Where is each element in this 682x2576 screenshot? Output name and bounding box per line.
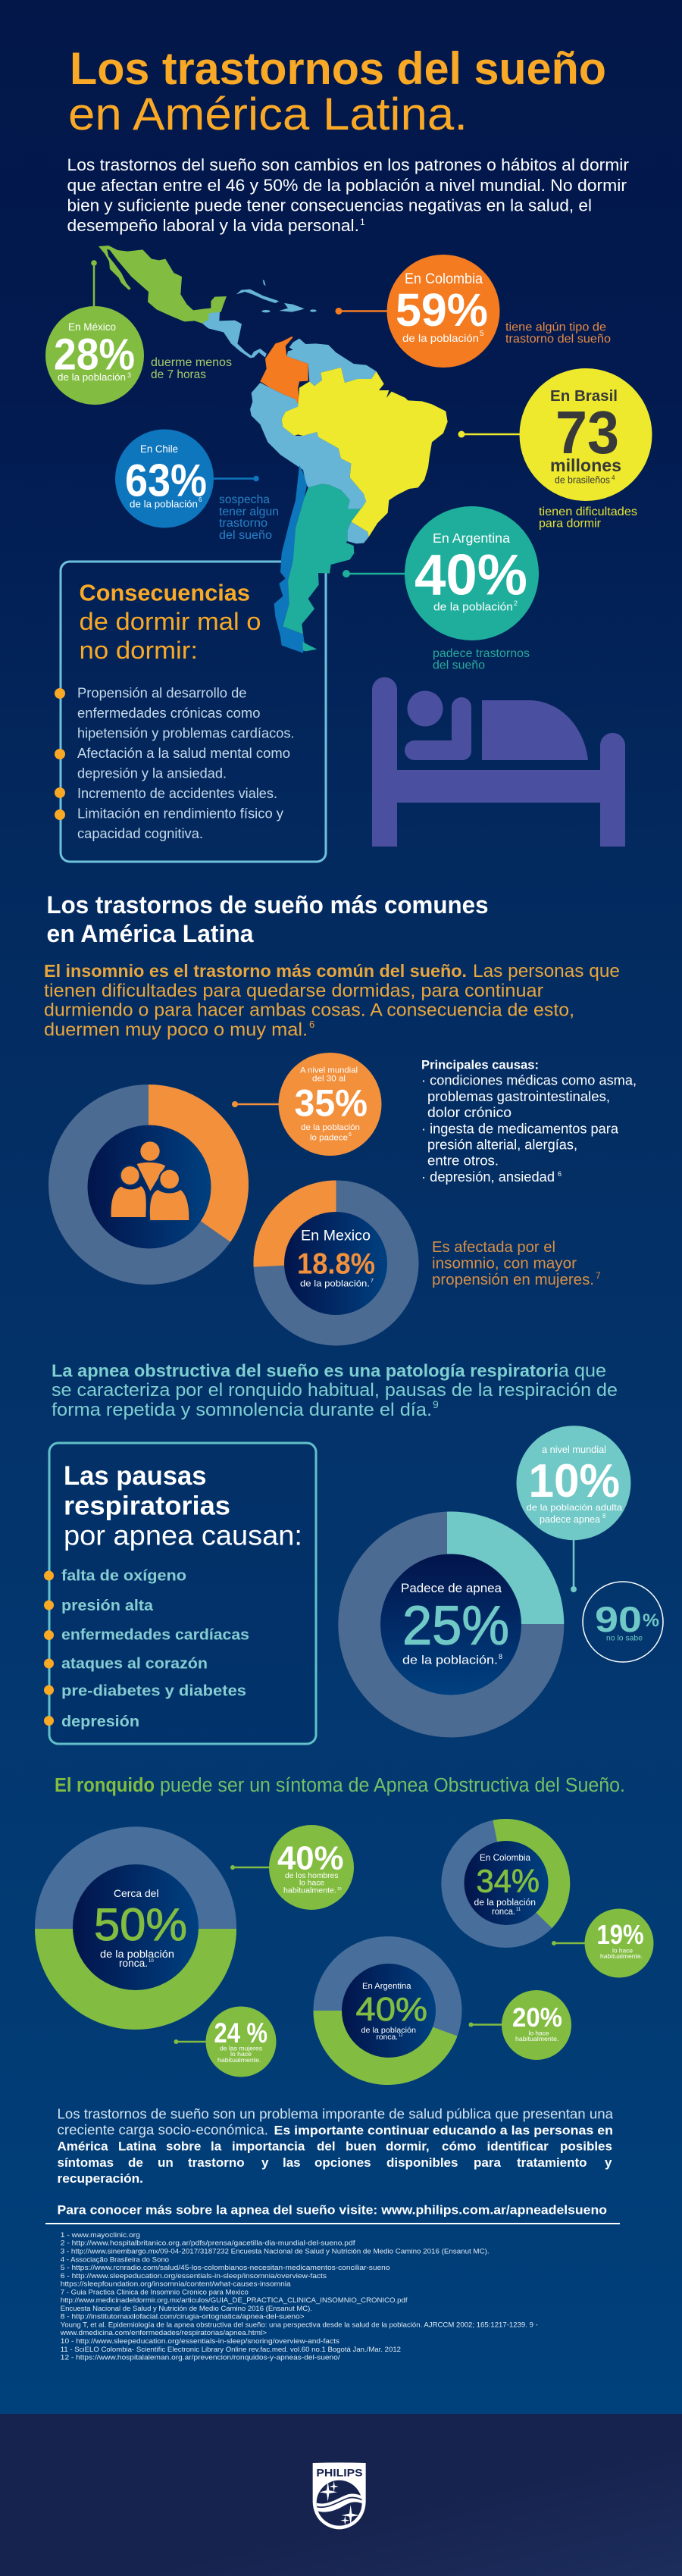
callout: Argentina: del sueño	[433, 659, 485, 671]
closing text: las	[283, 2155, 301, 2170]
map: Uruguay	[347, 521, 369, 543]
closing text: disponibles	[386, 2155, 458, 2170]
donut chart: insomnia in Mexico	[253, 1181, 418, 1346]
text: main causes: problemas gastrointestinales,	[427, 1089, 610, 1104]
closing text: Para conocer más sobre la apnea del sueño visite: www.philips.com.ar/apneadelsueno	[58, 2202, 607, 2218]
list of effects: ataques al corazón	[61, 1655, 208, 1672]
closing text: Los trastornos de sueño son un problema imporante de salud pública que presentan una	[58, 2105, 614, 2122]
references: 1 - www.mayoclinic.org	[61, 2231, 140, 2240]
text: sleep apnea: forma repetida y somnolencia durante el día.	[52, 1400, 432, 1420]
callout: Brasil: millones	[550, 455, 621, 475]
heading: snoring: El ronquido	[55, 1775, 155, 1796]
closing text: opciones	[314, 2155, 371, 2170]
map of Latin America	[99, 246, 448, 653]
callout: 35 percent	[232, 1053, 382, 1156]
bullet dots	[55, 688, 65, 820]
closing text: trastorno	[188, 2155, 245, 2170]
intro text: que afectan entre el 46 y 50% de la población a nivel mundial. No dormir	[67, 176, 627, 195]
text: main causes: dolor crónico	[427, 1105, 512, 1120]
heading: consecuencias: Consecuencias	[79, 579, 250, 606]
closing text: para	[474, 2155, 501, 2170]
closing text: y	[605, 2155, 612, 2170]
donut chart: sleep apnea	[338, 1511, 564, 1737]
callout: 24 percent of women: lo hace	[230, 2050, 252, 2058]
closing text: América	[58, 2139, 108, 2154]
callout: 40 percent of men: 10	[337, 1887, 342, 1892]
text: main causes: · condiciones médicas como asma,	[421, 1073, 637, 1088]
closing text: importancia	[232, 2139, 305, 2154]
callout: 10 percent: de la población adulta	[526, 1502, 622, 1513]
intro text	[67, 155, 629, 235]
callout: 24 percent of women	[174, 2007, 276, 2077]
icon: Philips shield logo: PHILIPS	[316, 2467, 363, 2479]
callout: Mexico	[45, 260, 232, 405]
list of effects: presión alta	[61, 1598, 154, 1614]
references: http://www.medicinadeldormir.org.mx/articulos/GUIA_DE_PRACTICA_CLINICA_INSOMNIO_CRONICO.pdf	[61, 2296, 408, 2305]
callout: Colombia	[335, 255, 611, 368]
callout: Colombia: En Colombia	[405, 271, 483, 287]
callout: Brasil: 4	[612, 474, 615, 481]
closing text: la	[211, 2139, 222, 2154]
closing text: sobre	[166, 2139, 201, 2154]
list of consequences: depresión y la ansiedad.	[77, 765, 227, 781]
closing text: buen	[346, 2139, 377, 2154]
callout: 35 percent: 35%	[294, 1082, 368, 1125]
text: sleep apnea: se caracteriza por el ronquido habitual, pausas de la respiración de	[52, 1380, 618, 1401]
donut chart: Colombia 34 percent: de la población	[474, 1898, 536, 1908]
callout: Colombia: 59%	[396, 284, 488, 336]
map: Colombia	[260, 336, 308, 407]
callout: 20 percent Argentina: 20%	[512, 2003, 562, 2033]
donut chart: Argentina 40 percent: 40%	[356, 1991, 427, 2028]
callout: Chile: de la población	[130, 499, 198, 509]
callout: Chile: tener algun	[219, 505, 279, 518]
text: sleep apnea: La apnea obstructiva del sueño es una patología respiratori	[52, 1361, 558, 1381]
closing text: del	[317, 2139, 336, 2154]
references: 10 - http://www.sleepeducation.org/essentials-in-sleep/snoring/overview-and-facts	[61, 2337, 339, 2346]
heading: las pausas respiratorias: por apnea causan:	[64, 1520, 302, 1551]
list of consequences: enfermedades crónicas como	[77, 706, 261, 721]
text: sleep apnea: 9	[433, 1398, 439, 1410]
callout: 20 percent Argentina: lo hace	[529, 2030, 549, 2037]
callout: Argentina: padece trastornos	[433, 647, 530, 660]
title: en América Latina.	[68, 89, 468, 139]
closing text: posibles	[560, 2139, 612, 2154]
callout: 19 percent Colombia: habitualmente.	[600, 1952, 643, 1960]
closing text: dormir,	[386, 2139, 430, 2154]
heading: consecuencias	[79, 579, 261, 664]
text: main causes: · depresión, ansiedad	[421, 1169, 555, 1185]
intro text: desempeño laboral y la vida personal.	[67, 216, 359, 235]
closing text: creciente carga socio-económica.	[58, 2122, 268, 2137]
closing text: un	[158, 2155, 174, 2170]
callout: 90 percent: 90	[595, 1599, 642, 1639]
callout: Colombia: trastorno del sueño	[505, 333, 611, 346]
donut chart: Colombia 34 percent: 11	[516, 1908, 521, 1912]
callout: Chile: 63%	[125, 455, 207, 506]
callout: Brasil: para dormir	[539, 517, 602, 531]
text: insomnia: duermen muy poco o muy mal.	[44, 1020, 308, 1040]
text: sleep apnea	[52, 1361, 618, 1420]
text: insomnia: 6	[309, 1019, 314, 1030]
icon: person in bed	[372, 678, 625, 847]
list of consequences	[77, 685, 294, 841]
text: Mexico insomnia note: propensión en mujeres.	[432, 1272, 594, 1288]
donut chart: Colombia 34 percent	[441, 1819, 570, 1948]
donut chart: sleep apnea: de la población.	[402, 1654, 498, 1667]
callout: Chile: sospecha	[219, 493, 270, 506]
closing text: identificar	[486, 2139, 549, 2154]
list of consequences: Afectación a la salud mental como	[77, 746, 290, 761]
references: 11 - SciELO Colombia- Scientific Electronic Library Online rev.fac.med. vol.60 no.1 Bogotá Jan./Mar. 2012	[61, 2346, 401, 2354]
references: 6 - http://www.sleepeducation.org/essentials-in-sleep/insomnia/overview-facts	[61, 2272, 327, 2280]
text: main causes: presión alterial, alergías,	[427, 1137, 577, 1152]
map: Ecuador, Peru, Bolivia, Paraguay	[250, 383, 368, 509]
references: 3 - http://www.sinembargo.mx/09-04-2017/3187232 Encuesta Nacional de Salud y Nutrición de Medio Camino 2016 (Ensanut MC).	[61, 2248, 490, 2255]
callout: Brasil: 73	[555, 399, 619, 466]
callout: 35 percent: A nivel mundial	[300, 1066, 358, 1075]
donut chart: sleep apnea: Padece de apnea	[401, 1581, 502, 1595]
footer band	[0, 2414, 682, 2576]
donut chart: 50 percent snore: 10	[149, 1959, 154, 1964]
heading: consecuencias: de dormir mal o	[79, 608, 261, 635]
text: Mexico insomnia note: Es afectada por el	[432, 1239, 555, 1256]
map: Chile	[274, 465, 307, 653]
references: Encuesta Nacional de Salud y Nutrición de Medio Camino 2016 (Ensanut MC).	[61, 2305, 312, 2313]
closing text	[58, 2105, 614, 2218]
references: https://sleepfoundation.org/insomnia/content/what-causes-insomnia	[61, 2280, 291, 2289]
callout: Colombia: de la población	[402, 332, 479, 344]
callout: Argentina	[343, 506, 539, 671]
callout: 35 percent: 6	[349, 1132, 352, 1138]
list of effects: depresión	[61, 1714, 139, 1730]
intro text: bien y suficiente puede tener consecuencias negativas en la salud, el	[67, 196, 592, 215]
callout: 90 percent: %	[643, 1610, 659, 1631]
text: insomnia: tienen dificultades para quedarse dormidas, para continuar	[44, 981, 543, 1001]
callout: 40 percent of men	[230, 1825, 354, 1910]
callout: 24 percent of women: 24 %	[214, 2017, 267, 2049]
donut chart: Argentina 40 percent: de la población	[361, 2026, 416, 2035]
list of effects: enfermedades cardíacas	[61, 1626, 249, 1643]
map: Mexico	[99, 246, 227, 324]
callout: 10 percent	[517, 1426, 630, 1592]
text: main causes: · ingesta de medicamentos para	[421, 1122, 619, 1137]
donut chart: Colombia 34 percent: 34%	[476, 1863, 540, 1899]
callout: Mexico: de 7 horas	[151, 368, 206, 381]
callout: 90 percent: no lo sabe	[606, 1634, 643, 1643]
callout: Chile	[115, 429, 279, 542]
callout: 20 percent Argentina: habitualmente.	[515, 2035, 559, 2042]
heading: most common disorders: en América Latina	[47, 920, 254, 947]
text: main causes: 6	[558, 1170, 562, 1178]
donut chart: Colombia 34 percent: En Colombia	[480, 1852, 530, 1863]
intro text: 1	[360, 217, 365, 227]
callout: 35 percent: lo padece	[310, 1134, 348, 1143]
callout: Argentina: En Argentina	[433, 531, 510, 546]
callout: 90 percent	[583, 1582, 663, 1662]
callout: 24 percent of women: de las mujeres	[220, 2045, 262, 2052]
callout: Mexico: En México	[68, 321, 116, 333]
callout: Brasil	[458, 368, 652, 531]
closing text: y	[261, 2155, 269, 2170]
callout: Argentina: de la población	[433, 602, 513, 614]
icon: group of people	[111, 1141, 189, 1220]
callout: 10 percent: 10%	[529, 1455, 620, 1507]
donut chart: 50 percent snore	[35, 1826, 236, 2030]
text: Mexico insomnia note	[432, 1239, 601, 1288]
closing text: Es importante continuar educando a las personas en	[274, 2124, 613, 2137]
icon: shield waves and stars	[317, 2481, 362, 2525]
donut chart: Colombia 34 percent: ronca.	[492, 1908, 515, 1917]
heading: most common disorders	[47, 891, 488, 947]
title	[68, 43, 606, 139]
references: 12 - https://www.hospitalaleman.org.ar/prevencion/ronquidos-y-apneas-del-sueno/	[61, 2354, 340, 2362]
references	[60, 2231, 538, 2362]
map: Brazil	[282, 368, 448, 537]
callout: 19 percent Colombia: lo hace	[612, 1946, 633, 1954]
references: www.dmedicina.com/enfermedades/respiratorias/apnea.html>	[60, 2329, 267, 2337]
list of consequences: Limitación en rendimiento físico y	[77, 806, 283, 822]
donut chart: Argentina 40 percent: 12	[399, 2033, 403, 2038]
donut chart: Argentina 40 percent: En Argentina	[362, 1982, 411, 1991]
closing text: de	[128, 2155, 143, 2170]
donut chart: insomnia in Mexico: 7	[371, 1279, 374, 1284]
callout: 40 percent of men: lo hace	[299, 1878, 324, 1887]
text: main causes	[421, 1058, 637, 1185]
callout: 20 percent Argentina	[468, 1990, 571, 2060]
bullet dots	[44, 1570, 54, 1726]
callout: 35 percent: del 30 al	[312, 1075, 346, 1084]
icon: Philips shield logo	[313, 2462, 366, 2529]
panel: respiratory pauses box	[44, 1443, 316, 1744]
text: sleep apnea: a que	[558, 1361, 606, 1381]
donut chart: insomnia worldwide	[48, 1085, 249, 1285]
text: main causes: entre otros.	[427, 1153, 499, 1169]
callout: Brasil: de brasileños	[555, 474, 610, 485]
callout: Mexico: duerme menos	[151, 356, 232, 369]
heading: las pausas respiratorias	[64, 1461, 302, 1551]
references: 7 - Guia Practica Clinica de Insomnio Cronico para Mexico	[61, 2289, 249, 2296]
callout: 35 percent: de la población	[301, 1123, 360, 1132]
panel: consecuencias box	[55, 562, 326, 862]
donut chart: sleep apnea: 25%	[402, 1596, 509, 1657]
heading: las pausas respiratorias: Las pausas	[64, 1461, 206, 1491]
callout: Mexico: 28%	[54, 330, 135, 379]
text: insomnia	[44, 961, 620, 1040]
list of effects	[61, 1567, 249, 1730]
donut chart: 50 percent snore: de la población	[100, 1948, 174, 1960]
map: Venezuela and Guianas	[286, 339, 377, 386]
map: Central America and Caribbean	[202, 280, 317, 358]
donut chart: 50 percent snore: ronca.	[119, 1958, 148, 1969]
donut chart: insomnia in Mexico: 18.8%	[297, 1247, 375, 1281]
closing text: cómo	[442, 2139, 476, 2154]
donut chart: 50 percent snore: Cerca del	[114, 1887, 159, 1899]
references: 8 - http://institutomaxilofacial.com/cirugia-ortognatica/apnea-del-sueno>	[61, 2313, 305, 2321]
map: Argentina	[283, 484, 366, 651]
donut chart: insomnia in Mexico: En Mexico	[301, 1228, 371, 1244]
heading: most common disorders: Los trastornos de sueño más comunes	[47, 891, 488, 919]
callout: 10 percent: 8	[602, 1513, 606, 1520]
callout: Colombia: tiene algún tipo de	[505, 321, 606, 333]
text: main causes: Principales causas:	[421, 1058, 539, 1072]
references: Young T, et al. Epidemiología de la apnea obstructiva del sueño: una perspectiva desde la salud de la población. AJRCCM 2002; 165:1217-1239. 9 -	[61, 2321, 538, 2330]
callout: Mexico: de la población	[58, 372, 126, 383]
list of consequences: Propensión al desarrollo de	[77, 685, 247, 700]
text: Mexico insomnia note: 7	[596, 1270, 601, 1281]
callout: 10 percent: padece apnea	[540, 1514, 600, 1525]
title: Los trastornos del sueño	[70, 43, 606, 94]
callout: Brasil: En Brasil	[550, 388, 618, 405]
list of consequences: capacidad cognitiva.	[77, 826, 203, 841]
callout: 40 percent of men: habitualmente.	[283, 1886, 336, 1895]
closing text: tratamiento	[517, 2155, 587, 2170]
callout: Chile: trastorno	[219, 517, 267, 530]
text: Mexico insomnia note: insomnio, con mayor	[432, 1255, 577, 1272]
references: 2 - http://www.hospitalbritanico.org.ar/pdfs/prensa/gacetilla-dia-mundial-del-sueno.pdf	[61, 2239, 355, 2248]
references: 5 - https://www.rcnradio.com/salud/45-los-colombianos-necesitan-medicamentos-conciliar-sueno	[61, 2264, 390, 2272]
callout: 40 percent of men: 40%	[277, 1840, 344, 1876]
text: insomnia: durmiendo o para hacer ambas cosas. A consecuencia de esto,	[44, 1000, 574, 1020]
callout: Chile: En Chile	[140, 443, 178, 455]
donut chart: Argentina 40 percent	[314, 1936, 462, 2085]
intro text: Los trastornos del sueño son cambios en los patrones o hábitos al dormir	[67, 155, 629, 174]
heading: consecuencias: no dormir:	[79, 637, 198, 664]
donut chart: 50 percent snore: 50%	[94, 1899, 187, 1950]
callout: Argentina: 40%	[415, 543, 527, 608]
callout: 19 percent Colombia	[552, 1908, 653, 1978]
list of consequences: hipetensión y problemas cardíacos.	[77, 726, 294, 741]
callout: 10 percent: a nivel mundial	[542, 1445, 606, 1455]
references: 4 - Associação Brasileira do Sono	[61, 2255, 169, 2265]
callout: Argentina: 2	[514, 599, 518, 607]
donut chart: insomnia in Mexico: de la población.	[300, 1278, 370, 1288]
donut chart: sleep apnea: 8	[499, 1653, 502, 1660]
callout: Chile: 6	[199, 496, 202, 503]
heading: las pausas respiratorias: respiratorias	[64, 1491, 230, 1520]
callout: Chile: del sueño	[219, 529, 272, 542]
callout: 24 percent of women: habitualmente.	[217, 2056, 261, 2064]
callout: Mexico: 3	[127, 371, 131, 379]
list of consequences: Incremento de accidentes viales.	[77, 786, 277, 801]
list of effects: falta de oxígeno	[61, 1567, 186, 1584]
closing text: síntomas	[58, 2155, 114, 2170]
heading: snoring: puede ser un síntoma de Apnea Obstructiva del Sueño.	[160, 1775, 625, 1796]
callout: 19 percent Colombia: 19%	[597, 1919, 644, 1950]
callout: 40 percent of men: de los hombres	[285, 1871, 338, 1880]
donut chart: Argentina 40 percent: ronca.	[376, 2033, 398, 2042]
list of effects: pre-diabetes y diabetes	[61, 1682, 246, 1699]
text: insomnia: El insomnio es el trastorno más común del sueño.	[44, 961, 467, 981]
callout: Colombia: 5	[480, 330, 484, 338]
closing text: recuperación.	[58, 2171, 143, 2186]
text: insomnia: Las personas que	[473, 961, 620, 981]
closing text: Latina	[118, 2139, 157, 2154]
callout: Brasil: tienen dificultades	[539, 505, 637, 518]
